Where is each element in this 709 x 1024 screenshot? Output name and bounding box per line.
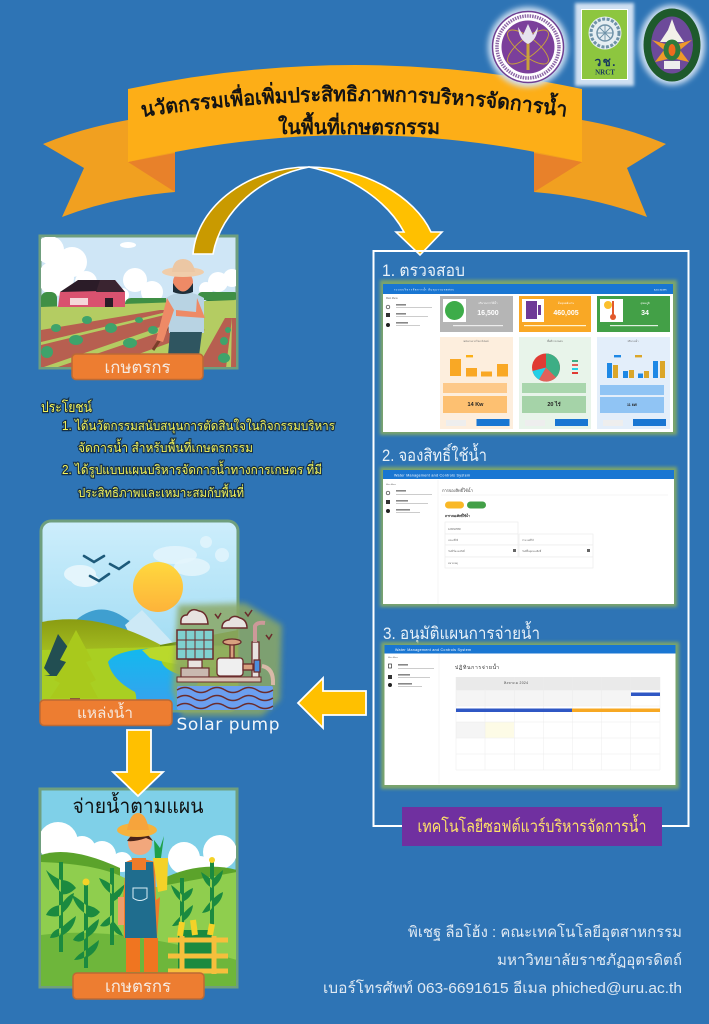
card: temperature: อุณหภูมิ [640,301,650,306]
label: water source [40,700,172,726]
heading: deliver water according to plan: จ่ายน้ำตามแผน [72,792,204,818]
screen: water reservation form: Main Menu [386,484,396,486]
chart: bar energy: 14 Kw [468,402,484,408]
logo: NRCT: NRCT [595,68,615,76]
heading: step 3: 3. อนุมัติแผนการจ่ายน้ำ [383,621,540,644]
card: water volume [440,296,513,332]
logo: Uttaradit Rajabhat University [639,5,705,85]
card: cost [519,296,591,332]
solar pump caption: Solar pump [176,715,280,735]
illustration: corn farmer [38,813,237,987]
ribbon right tail [534,120,666,217]
screen: calendar [381,642,679,789]
panel: farmer [36,236,241,380]
text block: benefits [41,399,335,500]
form field labels [448,528,542,566]
screen: dashboard [380,280,677,435]
sidebar menu [386,297,432,327]
ribbon folds [128,153,175,192]
logo: NRCT [575,3,634,86]
text block: contact: พิเชฐ ลือโฮ้ง : คณะเทคโนโลยีอุตสาหกรรม [408,923,682,942]
benefit 1: 1. ได้นวัตกรรมสนับสนุนการตัดสินใจในกิจกรรมบริหาร [62,419,335,434]
card: cost: 460,005 [553,310,579,317]
form fields [445,522,593,568]
calendar grid [456,677,660,770]
benefit 1: จัดการน้ำ สำหรับพื้นที่เกษตรกรรม [78,438,253,455]
card: temperature: 34 [641,310,649,317]
illustration: landscape [42,536,238,710]
screen: dashboard: Admin ADMIN [654,288,667,292]
benefits heading: ประโยชน์ [41,399,92,415]
ribbon main band [128,65,582,162]
illustration: farm scene [36,236,241,368]
logos [488,3,705,87]
benefit 1 [62,419,335,455]
benefit 2 [62,460,322,500]
screen: dashboard: ระบบบริหารจัดการน้ำ ต้นทุนรวมทดสอบ [394,288,454,292]
chart: bar energy: พลังงานจากโซลาร์เซลล์ [464,339,489,343]
card: water volume: ปริมาณการใช้น้ำ [478,301,498,305]
chart: grouped bars [597,337,670,429]
panel: water source [40,521,238,726]
card: temperature [597,296,670,332]
form field labels: 12345/2568 [448,528,461,531]
form field labels: วันที่สิ้นสุดจองสิทธิ์ [522,549,542,554]
card: cost: ต้นทุนพลังงาน [558,301,574,306]
pump machine [217,623,273,685]
logo: NRCT: วช. [594,55,616,69]
panel: water delivered according to plan [38,789,237,999]
form field labels: หมายเหตุ [448,562,458,566]
screen: calendar: ปฏิทินการจ่ายน้ำ [455,663,499,671]
card: water volume: 16,500 [477,310,499,317]
screen: water reservation form [380,467,677,607]
title line 1: นวัตกรรมเพื่อเพิ่มประสิทธิภาพการบริหารจัดการน้ำ [141,82,566,117]
form field labels: จำนวนที่ใช้ [522,538,534,542]
text block: contact: เบอร์โทรศัพท์ 063-6691615 อีเมล phiched@uru.ac.th [323,979,682,997]
heading: step 2: 2. จองสิทธิ์ใช้น้ำ [382,443,487,465]
sidebar menu: Main Menu [386,297,398,300]
logo: research institute seal [488,7,568,87]
screen: calendar: Water Management and Controls System [395,648,471,652]
platform [177,677,261,682]
heading: step 1: 1. ตรวจสอบ [382,261,465,280]
arrow: down from water source to farmer [113,730,163,796]
label: farmer [73,973,204,999]
text block: contact: มหาวิทยาลัยราชภัฏอุตรดิตถ์ [497,952,682,970]
label: farmer: เกษตรกร [105,977,171,996]
chart: grouped bars: ปริมาณน้ำ [628,339,639,343]
title ribbon [43,65,666,217]
water [177,686,273,710]
buttons [445,502,486,508]
form field labels: แปลงที่ใช้ [448,538,458,542]
chart: bar energy [440,337,513,429]
screen: water reservation form: Water Management and Controls System [394,474,470,478]
title line 2: ในพื้นที่เกษตรกรรม [278,111,440,139]
benefit 2: ประสิทธิภาพและเหมาะสมกับพื้นที่ [78,483,244,500]
screen: water reservation form: ตารางจองสิทธิ์ใช้น้ำ [445,512,470,518]
label: water source: แหล่งน้ำ [77,702,133,722]
panel: software frame [374,251,688,846]
label: farmer [72,354,203,380]
text block: contact [323,923,682,997]
form field labels: วันที่เริ่มจองสิทธิ์ [448,549,466,553]
corn stalks drawn as tapered leaves [46,862,76,952]
calendar grid: สิงหาคม 2024 [504,681,528,685]
arrow: left from software to solar pump [298,678,366,728]
solar panel [177,630,213,677]
chart: pie area [519,337,591,429]
label: farmer: เกษตรกร [104,358,170,377]
label: water management software technology [402,807,662,846]
chart: pie area: 20 ไร่ [547,400,561,408]
benefit 2: 2. ได้รูปแบบแผนบริหารจัดการน้ำทางการเกษตร ที่มี [62,460,322,478]
label: water management software technology: เทคโนโลยีซอฟต์แวร์บริหารจัดการน้ำ [418,814,646,836]
curved arrow from farmer to software [193,167,442,255]
screen: calendar: Main Menu [388,657,398,659]
chart: pie area: พื้นที่การเกษตร [547,339,563,343]
cloud icons [181,610,272,639]
icon: solar pump [172,603,282,735]
chart: grouped bars: 11 kW [627,403,638,407]
ribbon left tail [43,120,175,217]
screen: water reservation form: การจองสิทธิ์ใช้น้ำ [442,487,473,493]
